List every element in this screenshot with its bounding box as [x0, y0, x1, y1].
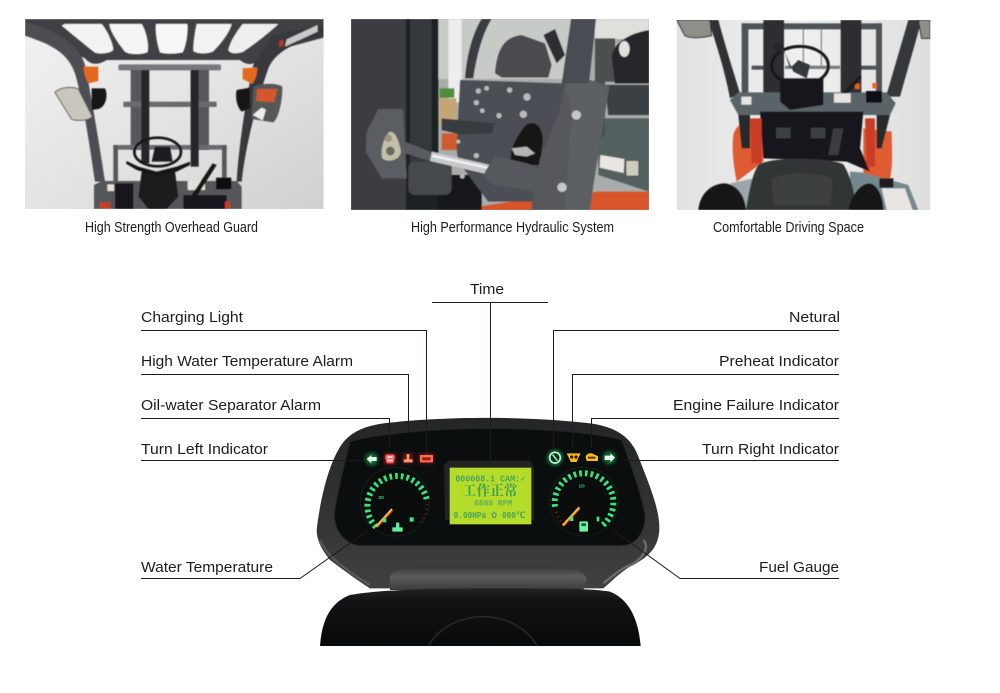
warning icons right: [547, 450, 616, 466]
callout: Netural: [554, 309, 840, 450]
pivot bracket: [366, 109, 407, 178]
seat: [746, 159, 855, 210]
callout: Fuel Gauge: Fuel Gauge: [759, 559, 839, 576]
photo: overhead guard: [25, 19, 324, 209]
LCD screen: 8888 RPM: [474, 499, 513, 508]
fender: [733, 122, 763, 182]
callout: Time: Time: [470, 281, 504, 298]
seat and rear parts: [465, 19, 492, 78]
callout: High Water Temperature Alarm: High Water Temperature Alarm: [141, 353, 353, 370]
left gauge: [361, 467, 429, 536]
orange chassis: [458, 192, 649, 210]
dark underside: [438, 174, 482, 210]
mast: [742, 20, 882, 97]
floor: [760, 112, 870, 172]
photo: hydraulic system: [351, 19, 649, 210]
cowl base: [94, 181, 242, 209]
bezel edge highlights: [603, 540, 646, 583]
LCD screen: 工作正常: [463, 480, 518, 500]
LCD screen: 0.00HPa ✿ 000℃: [454, 511, 525, 521]
callout: Preheat Indicator: Preheat Indicator: [719, 353, 839, 370]
dash cross member: [730, 92, 896, 115]
callout: Engine Failure Indicator: Engine Failure Indicator: [673, 397, 839, 414]
lower pod: [320, 588, 641, 646]
callout: Charging Light: Charging Light: [141, 309, 244, 326]
callout: Netural: Netural: [789, 309, 840, 326]
callout: Fuel Gauge: [613, 530, 839, 578]
caption: overhead guard: High Strength Overhead Guard: [85, 219, 258, 236]
right gauge: [550, 467, 618, 536]
pod recess: [428, 617, 537, 646]
warning icons left: [365, 452, 434, 466]
callout: Charging Light: [141, 309, 426, 452]
callout: Oil-water Separator Alarm: [141, 397, 390, 448]
bracket column: [530, 86, 592, 210]
mast: [113, 64, 227, 185]
photo: driving space: [677, 20, 930, 210]
rear deck: [850, 172, 918, 210]
caption: driving space: Comfortable Driving Space: [713, 219, 864, 236]
instrument glass: [334, 428, 645, 546]
mirrors: [55, 88, 92, 120]
callout: Water Temperature: Water Temperature: [141, 559, 273, 576]
bolts: [456, 85, 532, 180]
left mast: [351, 19, 406, 210]
bezel: [317, 418, 659, 588]
steering wheel: [780, 78, 823, 110]
callout: Water Temperature: [141, 531, 367, 578]
callout: Turn Right Indicator: Turn Right Indicator: [702, 441, 839, 458]
background scenery: [438, 19, 572, 79]
LCD screen: 000008.1 CAM:✓: [455, 475, 527, 485]
lamps: [83, 67, 98, 83]
right gauge: 1/0: [579, 483, 585, 488]
callout: Preheat Indicator: [572, 353, 839, 448]
left gauge: 20: [378, 495, 384, 501]
cylinder: [405, 142, 432, 162]
callout: Time: [432, 281, 548, 463]
callout: Oil-water Separator Alarm: Oil-water Separator Alarm: [141, 397, 321, 414]
callout: Turn Left Indicator: Turn Left Indicator: [141, 441, 268, 458]
LCD screen: [444, 461, 534, 524]
callout: High Water Temperature Alarm: [141, 353, 408, 433]
callout: Engine Failure Indicator: [592, 397, 839, 448]
steering wheel: [138, 172, 178, 209]
pillars: [708, 20, 740, 98]
mounting plate: [457, 80, 605, 202]
caption: hydraulic system: High Performance Hydraulic System: [411, 219, 614, 236]
bezel lower lip: [390, 566, 587, 590]
dashboard illustration: [317, 418, 659, 646]
canopy: [25, 19, 324, 64]
